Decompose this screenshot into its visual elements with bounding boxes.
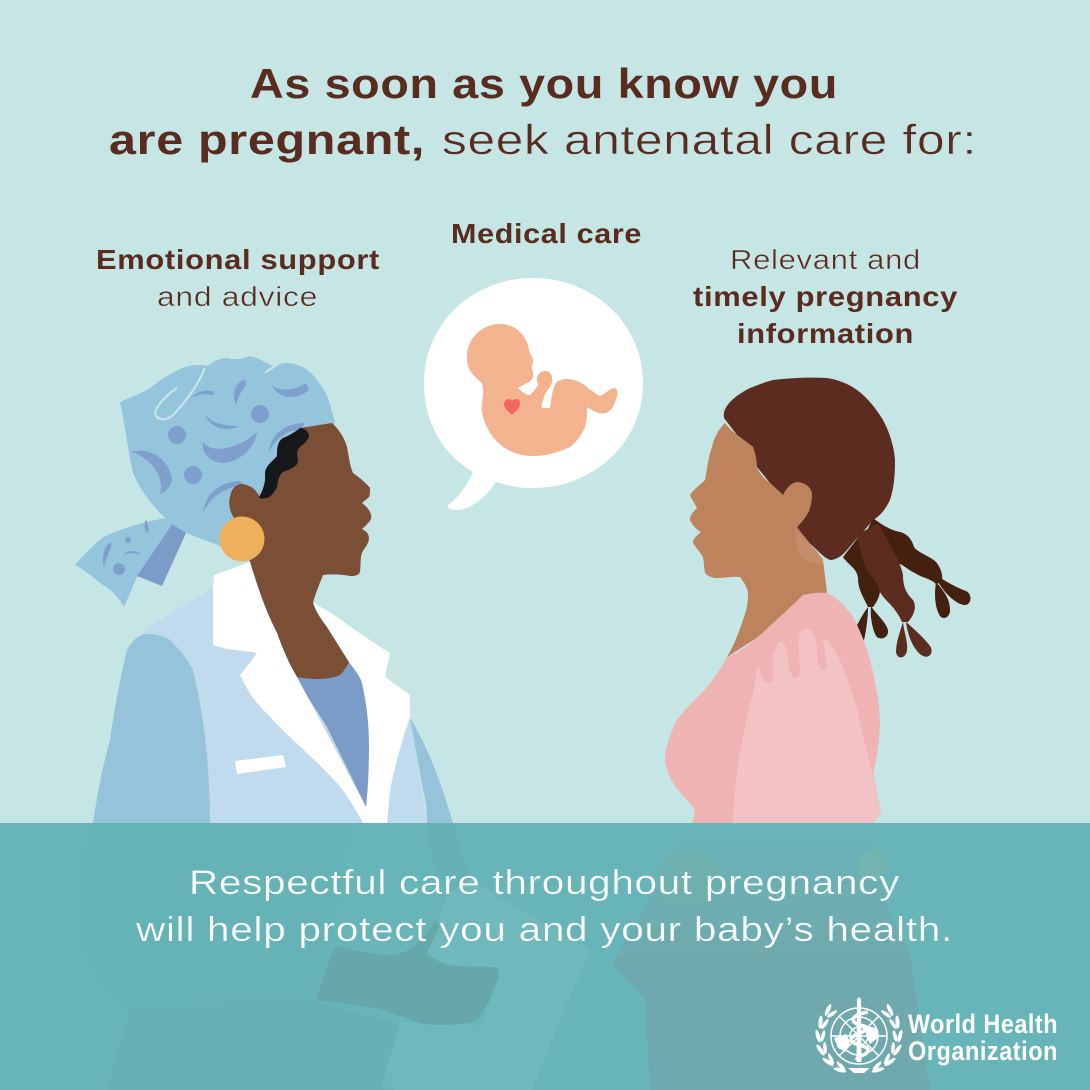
scarf tail front [75, 518, 173, 607]
label: pregnancy information: Relevant and [730, 244, 921, 275]
speech bubble with fetus [424, 278, 643, 510]
title: are pregnant, [109, 116, 425, 163]
coat right sleeve [410, 718, 453, 823]
ghost: woman hands [660, 850, 725, 905]
blue shirt [295, 662, 369, 807]
title: As soon as you know you [250, 60, 838, 107]
globe [831, 1008, 887, 1064]
label: emotional support: and advice [157, 281, 318, 312]
icon: heart [504, 399, 520, 415]
ghost: woman far hand [858, 848, 888, 880]
braid back right [865, 518, 970, 618]
neck and face [229, 423, 371, 679]
earring [220, 516, 264, 562]
scarf fold highlight [155, 363, 280, 419]
braid back left [843, 535, 888, 640]
scarf tail back [137, 523, 186, 586]
hair [724, 378, 895, 560]
closing message: will help protect you and your baby’s health. [135, 911, 953, 949]
ghost: doctor lower arm [107, 1000, 400, 1090]
label: pregnancy information [693, 244, 958, 349]
icon: fetus [467, 324, 617, 456]
hair [259, 428, 309, 499]
coat body [100, 588, 427, 823]
logo wordmark: Organization [908, 1036, 1058, 1066]
figure: health worker [75, 356, 453, 823]
staff and serpent [856, 998, 862, 1062]
dress [665, 593, 881, 823]
left laurel [814, 1003, 847, 1074]
ghost: pregnant figure [612, 823, 930, 1090]
closing message [135, 864, 953, 949]
ghost: hand [316, 920, 499, 1025]
braid front [857, 523, 932, 657]
ghost: coat front [382, 880, 590, 1090]
title [109, 60, 977, 163]
logo wordmark [908, 1009, 1058, 1066]
ghosted figures in band [79, 823, 930, 1090]
left lapel [213, 562, 372, 823]
figure: pregnant woman [665, 378, 970, 823]
scarf pattern [103, 380, 309, 575]
arm and hand on shoulder [733, 629, 881, 823]
scarf [120, 356, 335, 547]
neck shadow [795, 529, 823, 564]
ghost: coat sleeve [427, 823, 470, 895]
closing message: Respectful care throughout pregnancy [189, 864, 900, 902]
name badge [235, 755, 286, 774]
bottom band [0, 823, 1090, 1090]
emblem [814, 998, 904, 1074]
landmasses [834, 1034, 850, 1052]
label: emotional support: Emotional support [96, 244, 380, 275]
neck and face [690, 423, 827, 657]
right laurel [871, 1003, 904, 1074]
label: pregnancy information: timely pregnancy [693, 281, 958, 312]
label: emotional support [96, 244, 380, 312]
WHO logo [814, 998, 1058, 1074]
logo wordmark: World Health [908, 1009, 1058, 1039]
coat left sleeve [93, 634, 210, 823]
title: seek antenatal care for: [442, 116, 977, 163]
ghost: doctor left sleeve [79, 823, 350, 1030]
label: pregnancy information: information [737, 318, 914, 349]
label: medical care: Medical care [451, 218, 642, 249]
right lapel [314, 603, 410, 823]
ear [783, 482, 812, 528]
speech bubble [424, 278, 643, 510]
